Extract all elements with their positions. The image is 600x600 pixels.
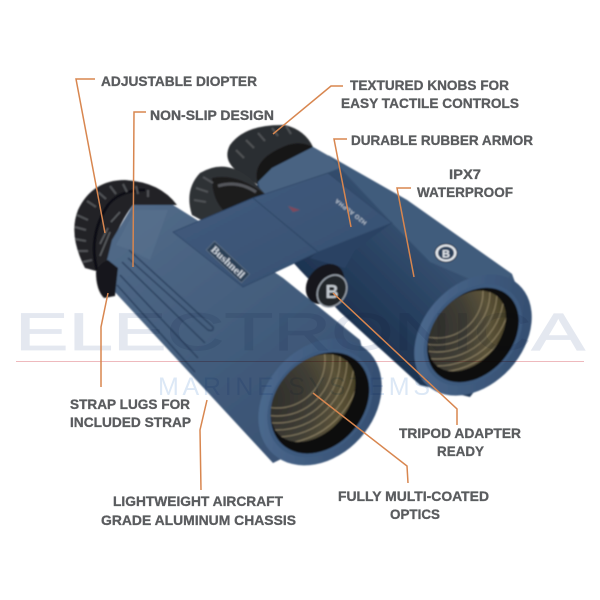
- bridge plate: [173, 173, 392, 287]
- label: IPX7 waterproof: WATERPROOF: [417, 185, 513, 200]
- label: textured knobs: TEXTURED KNOBS FOR: [350, 78, 509, 93]
- leader: optics: [313, 393, 408, 483]
- label: textured knobs: EASY TACTILE CONTROLS: [341, 96, 519, 111]
- label: textured knobs: [341, 78, 519, 111]
- focus wheel: [298, 256, 353, 313]
- label: tripod adapter: TRIPOD ADAPTER: [399, 426, 521, 441]
- label: strap lugs: STRAP LUGS FOR: [70, 397, 190, 412]
- left eyepiece: [74, 180, 177, 272]
- label: aluminum chassis: LIGHTWEIGHT AIRCRAFT: [113, 494, 284, 509]
- label: aluminum chassis: [101, 494, 296, 528]
- label: tripod adapter: [399, 426, 521, 459]
- left barrel: [106, 205, 370, 463]
- label: durable rubber armor: DURABLE RUBBER ARMOR: [351, 133, 533, 148]
- label: strap lugs: INCLUDED STRAP: [70, 415, 191, 430]
- leader: IPX7 waterproof: [397, 188, 414, 277]
- watermark: company name: ELECTRONICA: [15, 303, 586, 362]
- label: optics: OPTICS: [390, 507, 440, 522]
- label: optics: FULLY MULTI-COATED: [338, 489, 489, 504]
- Bushnell logo badge: [435, 244, 457, 262]
- barrel highlight: [116, 210, 168, 260]
- leader: strap lugs: [101, 293, 108, 387]
- strap lug: [96, 260, 118, 298]
- label: IPX7 waterproof: [417, 167, 513, 200]
- leader: non-slip design: [133, 112, 146, 267]
- right eyecup: [227, 125, 313, 185]
- leader: durable rubber armor: [334, 139, 351, 227]
- focus wheel: B: [326, 282, 338, 302]
- label: optics: [338, 489, 489, 522]
- right barrel: [250, 147, 529, 397]
- binoculars: [73, 124, 533, 466]
- labels: [70, 74, 533, 528]
- Bushnell badge: Bushnell: [208, 244, 246, 281]
- label: tripod adapter: READY: [437, 444, 484, 459]
- alpha label: H2O ALPHA: [334, 197, 368, 225]
- label: non-slip design: NON-SLIP DESIGN: [150, 108, 274, 123]
- leader lines: [76, 79, 457, 490]
- leader: tripod adapter: [333, 293, 457, 425]
- Bushnell logo badge: B: [442, 248, 450, 260]
- leader: textured knobs: [273, 86, 343, 134]
- Bushnell badge: [206, 241, 250, 283]
- middle knob: [189, 167, 268, 222]
- infographic canvas: [16, 76, 586, 526]
- label: strap lugs: [70, 397, 191, 430]
- watermark: subtitle: MARINE SYSTEMS: [158, 373, 430, 401]
- leader: adjustable diopter: [76, 79, 105, 233]
- leader: aluminum chassis: [200, 400, 207, 490]
- watermark: [15, 303, 586, 401]
- watermark: red rule: [16, 361, 584, 362]
- right objective: [414, 279, 533, 397]
- label: IPX7 waterproof: IPX7: [449, 167, 481, 182]
- grip ridges: [117, 250, 213, 372]
- label: aluminum chassis: GRADE ALUMINUM CHASSIS: [101, 513, 296, 528]
- left objective: [258, 344, 383, 466]
- label: adjustable diopter: ADJUSTABLE DIOPTER: [101, 74, 257, 89]
